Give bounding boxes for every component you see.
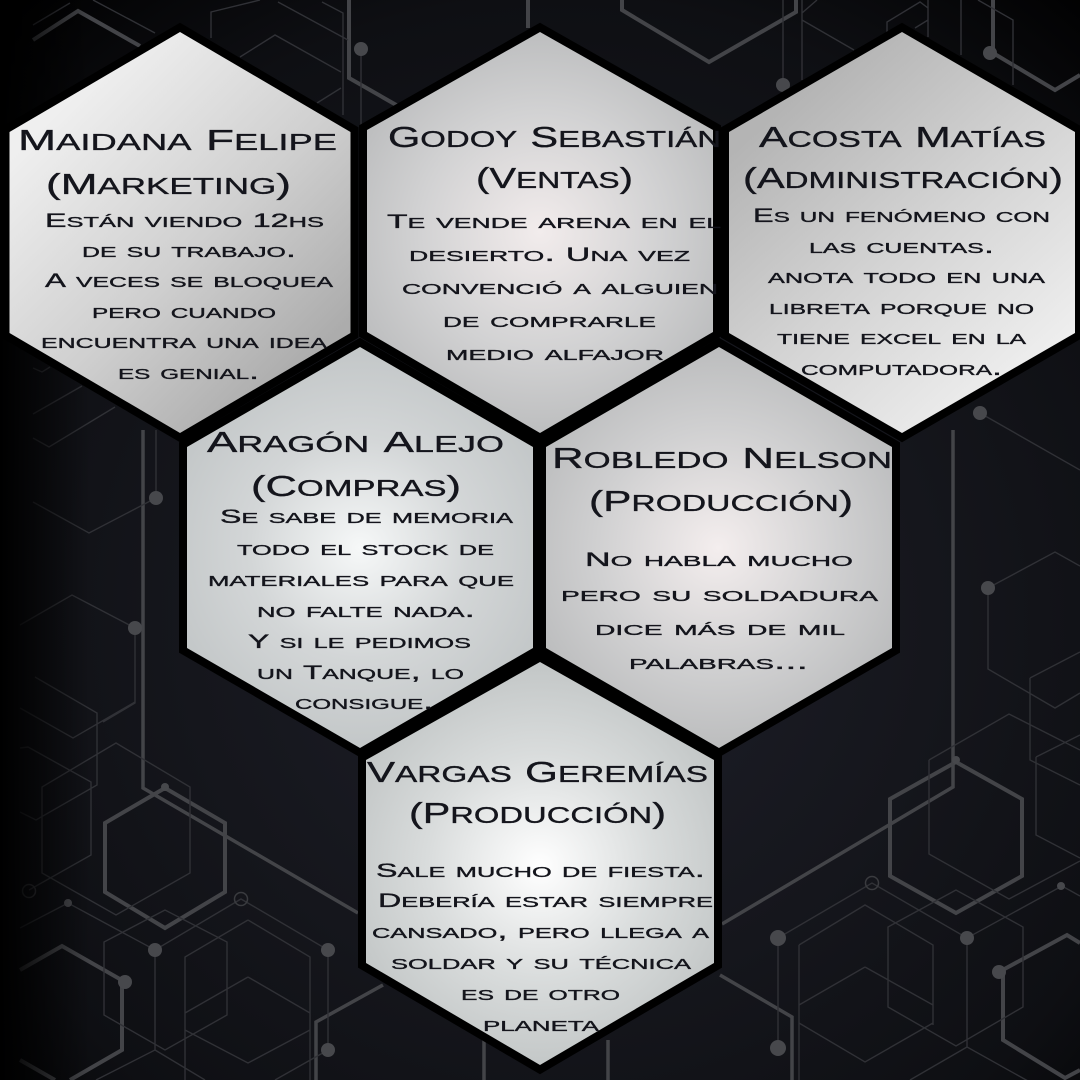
text block: description: [372, 857, 713, 1036]
text block: description: soldar y su técnica: [391, 949, 691, 974]
text block: description: desierto. U na vez: [409, 241, 690, 266]
text block: description: todo el stock de: [237, 535, 494, 560]
heading: name and role: [552, 438, 892, 518]
text block: description: [753, 202, 1050, 380]
heading: name and role: [388, 117, 721, 195]
heading: name and role: R obledo N elson: [552, 438, 892, 475]
text block: description: E stán viendo 12 hs: [45, 207, 324, 232]
text block: description: [41, 207, 333, 384]
text block: description: E s un fenómeno con: [753, 202, 1050, 227]
heading: name and role: A costa M atías: [759, 117, 1046, 154]
panel: Godoy Sebastián: [367, 32, 721, 433]
text block: description: es de otro: [461, 980, 620, 1005]
text block: description: palabras...: [629, 649, 808, 674]
text block: description: pero su soldadura: [561, 581, 878, 606]
heading: name and role: [367, 752, 708, 830]
text block: description: es genial.: [118, 359, 259, 384]
text block: description: libreta porque no: [769, 294, 1034, 319]
text block: description: Y si le pedimos: [248, 628, 471, 653]
text block: description: D ebería estar siempre: [378, 887, 713, 912]
text block: description: de su trabajo.: [82, 237, 296, 262]
text block: description: S ale mucho de fiesta.: [376, 857, 705, 882]
text block: description: [561, 546, 878, 674]
heading: name and role: A ragón A lejo: [207, 422, 504, 459]
heading: name and role: (M arketing ): [46, 164, 291, 201]
text block: description: planeta: [483, 1011, 599, 1036]
text block: description: A veces se bloquea: [45, 267, 333, 292]
heading: name and role: (A dministración ): [743, 158, 1063, 195]
text block: description: S e sabe de memoria: [220, 503, 513, 528]
panel: Vargas Geremías: [366, 662, 714, 1065]
text block: description: tiene excel en la: [777, 324, 1026, 349]
text block: description: medio alfajor: [446, 340, 664, 365]
heading: name and role: M aidana F elipe: [18, 120, 337, 157]
heading: name and role: [207, 422, 504, 503]
text block: description: N o habla mucho: [585, 546, 853, 571]
heading: name and role: (P roducción ): [589, 481, 853, 518]
text block: description: T e vende arena en el: [387, 208, 721, 233]
heading: name and role: G odoy S ebastián: [388, 117, 721, 154]
text block: description: cansado, pero llega a: [372, 918, 709, 943]
panel: Aragón Alejo: [187, 347, 533, 748]
text block: description: encuentra una idea: [41, 328, 327, 353]
text block: description: [208, 503, 514, 714]
text block: description: las cuentas.: [809, 233, 994, 258]
text block: description: un T anque, lo: [257, 659, 464, 684]
heading: name and role: [18, 120, 337, 201]
panel: Acosta Matías: [729, 32, 1075, 433]
text block: description: computadora.: [801, 355, 1002, 380]
text block: description: pero cuando: [92, 298, 276, 323]
text block: description: [387, 208, 721, 365]
heading: name and role: (V entas ): [476, 158, 633, 195]
text block: description: de comprarle: [443, 307, 656, 332]
panel: Maidana Felipe: [10, 32, 350, 433]
text block: description: materiales para que: [208, 566, 514, 591]
heading: name and role: (C ompras ): [251, 466, 461, 503]
text block: description: consigue.: [295, 689, 433, 714]
text block: description: anota todo en una: [768, 263, 1045, 288]
text block: description: convenció a alguien: [402, 274, 718, 299]
heading: name and role: V argas G eremías: [367, 752, 708, 789]
heading: name and role: [743, 117, 1063, 195]
heading: name and role: (P roducción ): [409, 793, 666, 830]
background: left edge shadow: [0, 0, 90, 1080]
text block: description: dice más de mil: [595, 615, 845, 640]
text block: description: no falte nada.: [257, 597, 475, 622]
panel: Robledo Nelson: [546, 347, 892, 748]
